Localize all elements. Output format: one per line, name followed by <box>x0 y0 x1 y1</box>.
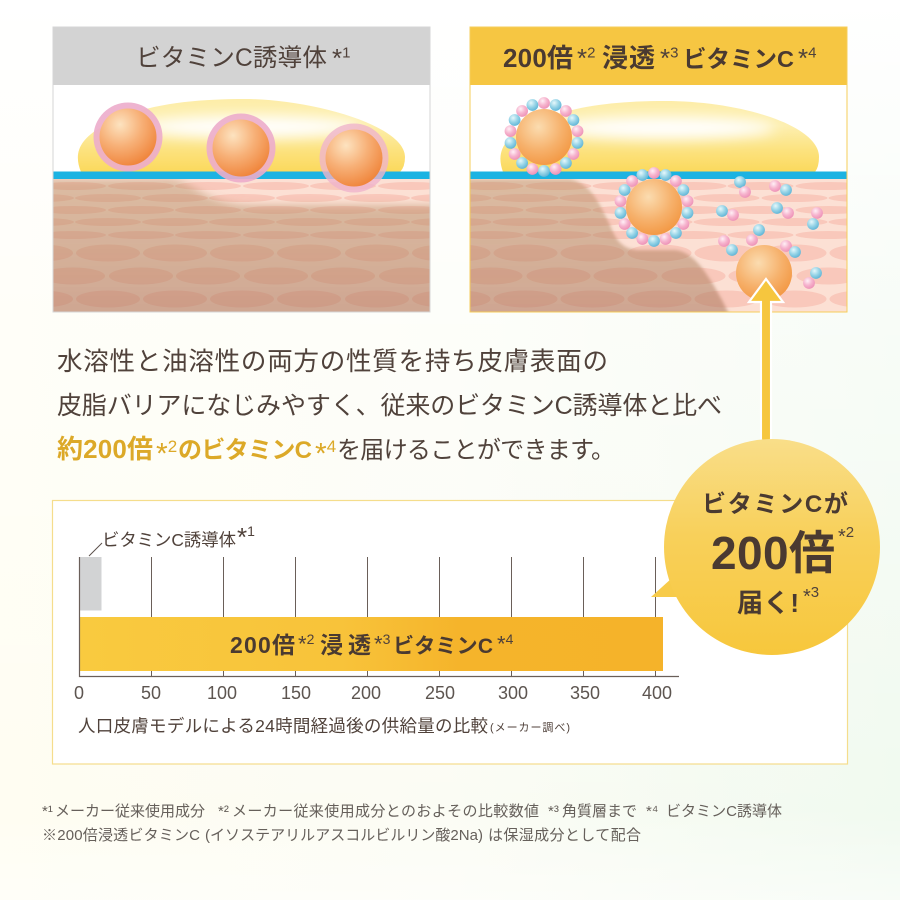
description text <box>57 348 722 470</box>
footnotes: ビタミンC誘導体 <box>666 803 782 820</box>
penetrating capsule inside skin <box>615 167 693 247</box>
bar: 200x penetrating vitamin C: 浸透 <box>320 632 371 658</box>
description text: 2 <box>168 437 177 456</box>
released vitamin C sphere <box>736 245 792 301</box>
heading: 200x penetrating vitamin C: 浸透 <box>602 43 655 73</box>
heading: 200x penetrating vitamin C: 3 <box>670 44 678 62</box>
skin layers <box>54 179 430 312</box>
sebum droplet <box>78 99 405 172</box>
description text: のビタミンC <box>178 437 312 464</box>
sebum droplet <box>500 101 819 172</box>
bar label with leader line <box>89 522 255 556</box>
footnotes: *² <box>218 803 229 820</box>
axis tick labels: 400 <box>642 683 672 703</box>
footnotes <box>42 802 782 844</box>
heading: 200x penetrating vitamin C: ビタミンC <box>683 46 794 72</box>
heading: vitamin C derivative: 1 <box>342 44 350 62</box>
footnotes: *¹ <box>42 803 53 820</box>
callout bubble <box>651 439 880 655</box>
footnotes: ※200倍浸透ビタミンC <box>42 827 200 844</box>
axis tick labels: 150 <box>281 683 311 703</box>
heading: 200x penetrating vitamin C: * <box>577 43 587 73</box>
chart caption: 人口皮膚モデルによる24時間経過後の供給量の比較 <box>78 716 488 736</box>
bar: 200x penetrating vitamin C: 4 <box>506 631 514 647</box>
axis tick labels: 200 <box>351 683 381 703</box>
skin layers <box>470 179 846 312</box>
heading: 200x penetrating vitamin C: * <box>798 43 808 73</box>
vitamin C derivative sphere 1 <box>94 102 162 172</box>
chart caption: (メーカー調べ) <box>490 721 570 734</box>
axis tick labels: 100 <box>207 683 237 703</box>
heading: 200x penetrating vitamin C: 2 <box>587 44 595 62</box>
bar label with leader line: * <box>237 522 247 552</box>
arrow <box>749 279 783 443</box>
bar: 200x penetrating vitamin C: 2 <box>307 631 315 647</box>
footnotes: は保湿成分として配合 <box>488 827 641 844</box>
heading: vitamin C derivative: * <box>332 43 342 73</box>
axis tick labels <box>74 683 672 703</box>
footnotes: (イソステアリルアスコルビルリン酸2Na) <box>205 827 483 844</box>
axis tick labels: 250 <box>425 683 455 703</box>
panel: vitamin C derivative <box>52 26 430 312</box>
bar: 200x penetrating vitamin C: 200倍 <box>230 632 295 658</box>
heading: 200x penetrating vitamin C: 4 <box>808 44 816 62</box>
bar: 200x penetrating vitamin C: 3 <box>383 631 391 647</box>
heading: vitamin C derivative: ビタミンC誘導体 <box>136 44 327 72</box>
heading: 200x penetrating vitamin C: 200倍 <box>503 43 573 73</box>
footnotes: 角質層まで <box>562 802 637 820</box>
axis tick labels: 300 <box>498 683 528 703</box>
description text: を届けることができます。 <box>337 437 615 464</box>
footnotes: メーカー従来使用成分とのおよその比較数値 <box>232 803 539 820</box>
description text: 皮脂バリアになじみやすく、従来のビタミンC誘導体と比べ <box>57 392 722 420</box>
callout bubble: * <box>803 586 811 608</box>
axis tick labels: 0 <box>74 683 84 703</box>
callout bubble: * <box>838 526 846 548</box>
bar label with leader line: ビタミンC誘導体 <box>102 530 236 550</box>
footnotes: *³ <box>548 803 559 820</box>
bar: vitamin C derivative <box>80 557 102 610</box>
description text: 4 <box>327 437 336 456</box>
callout bubble: ビタミンCが <box>702 490 848 518</box>
footnotes: メーカー従来使用成分 <box>55 803 205 820</box>
axis tick labels: 50 <box>141 683 161 703</box>
bar: 200x penetrating vitamin C: ビタミンC <box>393 635 493 658</box>
heading: 200x penetrating vitamin C: * <box>660 43 670 73</box>
bar label with leader line: 1 <box>247 523 255 539</box>
callout bubble: 200倍 <box>711 527 835 579</box>
heading: vitamin C derivative <box>53 27 430 85</box>
description text: 約200倍 <box>57 434 153 464</box>
heading: 200x penetrating vitamin C <box>470 27 847 85</box>
vitamin C derivative sphere 2 <box>206 114 276 182</box>
bar: 200x penetrating vitamin C <box>80 617 663 671</box>
bar: 200x penetrating vitamin C: * <box>374 632 383 657</box>
grid lines <box>152 557 656 677</box>
panel: 200x penetrating vitamin C <box>470 26 848 312</box>
sebum barrier line <box>470 172 847 179</box>
axis tick labels: 350 <box>570 683 600 703</box>
footnotes: *⁴ <box>646 803 658 820</box>
bar: 200x penetrating vitamin C: * <box>298 632 307 657</box>
description text: * <box>315 437 327 470</box>
bar: 200x penetrating vitamin C: * <box>497 632 506 657</box>
dispersed carrier particles <box>716 176 823 289</box>
callout bubble: 2 <box>846 524 854 541</box>
panel: bar chart <box>52 500 848 764</box>
sebum barrier line <box>53 172 430 179</box>
description text: * <box>156 437 168 470</box>
axes <box>80 557 679 676</box>
vitamin C derivative sphere 3 <box>320 124 388 192</box>
description text: 水溶性と油溶性の両方の性質を持ち皮膚表面の <box>57 348 608 376</box>
callout bubble: 3 <box>811 584 819 601</box>
penetrating capsule on surface <box>505 97 583 177</box>
callout bubble: 届く! <box>737 588 799 618</box>
